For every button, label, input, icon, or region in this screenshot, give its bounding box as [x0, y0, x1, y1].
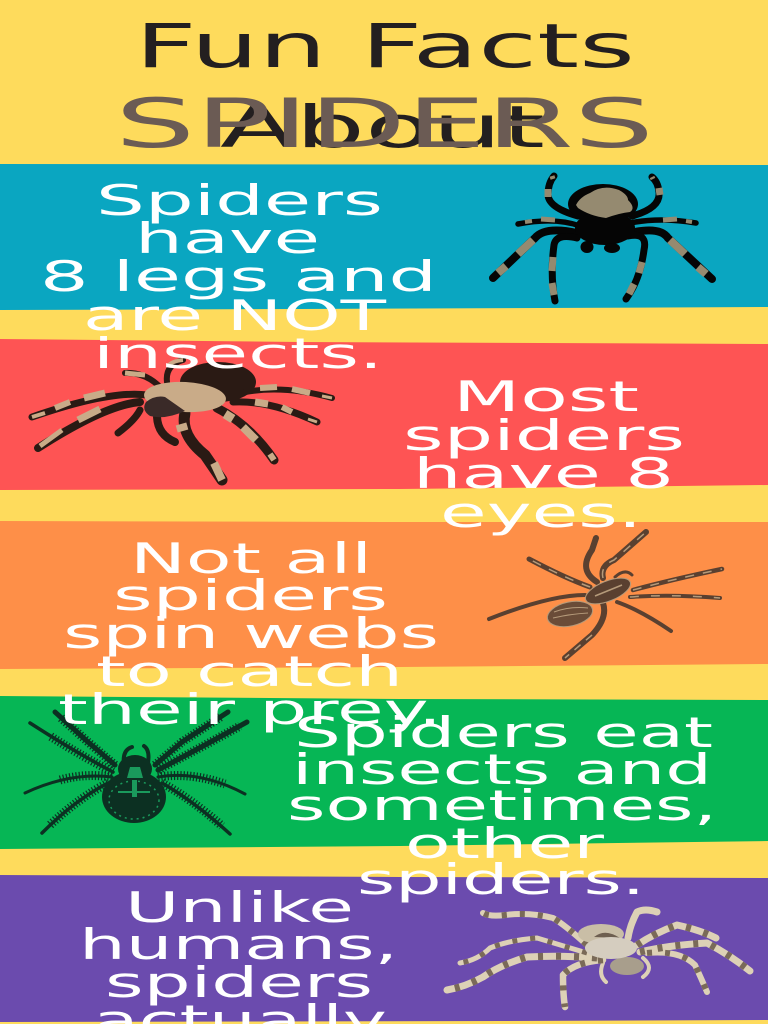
- text: fact 2: have 8: [413, 449, 674, 498]
- text: fact 1: Spiders: [96, 176, 383, 225]
- text: fact 4: insects and: [292, 745, 712, 794]
- text: fact 2: eyes.: [440, 488, 642, 537]
- text: fact 5: Unlike: [125, 883, 354, 932]
- text: fact 4: Spiders eat: [294, 708, 713, 757]
- text: fact 4: sometimes,: [287, 781, 717, 830]
- text: fact 2: Most: [453, 372, 639, 421]
- band: red: [0, 339, 768, 490]
- icon: black and tan spider on teal: [493, 176, 712, 301]
- text: fact 4: other: [405, 819, 605, 868]
- text: fact 4: [287, 708, 717, 904]
- icon: pale huntsman spider on purple: [447, 910, 750, 1007]
- heading: SPIDERS: SPIDERS: [115, 85, 654, 164]
- text: fact 3: spin webs: [63, 609, 439, 658]
- spider illustrations: [25, 176, 750, 1007]
- band: orange: [0, 521, 768, 669]
- heading: About: About: [220, 93, 545, 161]
- heading: Fun Facts: Fun Facts: [135, 11, 635, 82]
- text: fact 2: spiders: [403, 411, 685, 460]
- text: fact 4: spiders.: [357, 855, 645, 904]
- band: green: [0, 696, 768, 849]
- title: [115, 11, 654, 164]
- text: fact 2: [403, 372, 685, 537]
- text: fact 1: 8 legs and: [40, 252, 437, 301]
- text: fact 1: insects.: [93, 329, 383, 378]
- text: fact 3: [58, 534, 442, 734]
- icon: brown wolf spider on orange: [489, 532, 722, 658]
- icon: dark hairy spider on green: [25, 712, 247, 834]
- text: fact 1: have: [135, 214, 320, 263]
- icon: tarantula on red: [32, 360, 332, 480]
- text: fact 3: their prey.: [58, 685, 442, 734]
- text: fact 3: to catch: [96, 647, 403, 696]
- text: fact 5: [79, 883, 398, 1024]
- band: teal: [0, 164, 768, 310]
- text: fact 1: are NOT: [83, 291, 387, 340]
- text: fact 5: spiders: [105, 958, 373, 1007]
- text: fact 1: [40, 176, 437, 378]
- text: fact 5: humans,: [79, 920, 398, 969]
- band: purple: [0, 875, 768, 1022]
- text: fact 3: Not all: [130, 534, 372, 583]
- text: fact 3: spiders: [113, 571, 388, 620]
